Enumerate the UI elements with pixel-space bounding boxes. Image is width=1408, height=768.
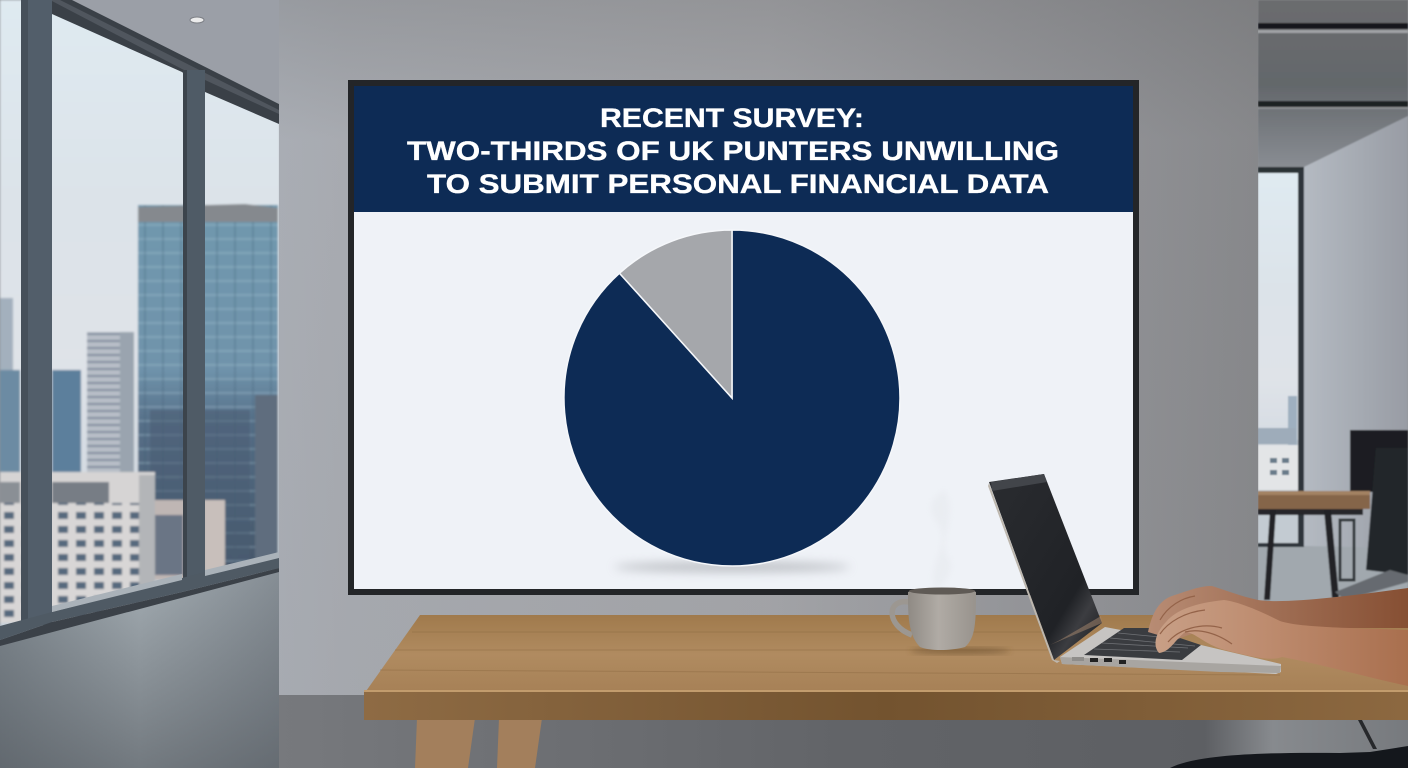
mug handle [892, 602, 912, 635]
table legs [415, 718, 542, 768]
left room floor [0, 570, 279, 768]
laptop lid [989, 474, 1102, 660]
left city view through windows [0, 0, 280, 650]
office chair [1335, 448, 1408, 600]
screen bezel [348, 80, 1139, 595]
table top [364, 615, 1408, 694]
mug body [908, 588, 976, 650]
finger creases [1160, 596, 1232, 644]
title: TWO-THIRDS OF UK PUNTERS UNWILLING [407, 136, 1059, 166]
window frames [0, 0, 279, 646]
pie slice: majority [564, 230, 900, 566]
skyline building striped [87, 332, 134, 472]
screen white panel [354, 86, 1133, 589]
laptop base [1060, 627, 1281, 674]
title [407, 103, 1059, 199]
left room ceiling [64, 0, 279, 104]
skyline building blue [52, 370, 81, 472]
skyline building left [0, 298, 13, 473]
laptop ports [1072, 657, 1126, 664]
table grain [380, 632, 1280, 675]
right room wall [1304, 116, 1408, 560]
low white building [0, 472, 155, 623]
laptop keyboard [1084, 628, 1201, 660]
chair leg under table [1358, 720, 1377, 749]
right room ceiling [1258, 0, 1408, 170]
right room background [1258, 0, 1408, 620]
low pink building [155, 500, 225, 580]
wall-mounted presentation screen [348, 80, 1139, 595]
title: RECENT SURVEY: [600, 103, 864, 133]
foreground wooden table [364, 615, 1408, 768]
near hand and arm [1155, 600, 1408, 686]
laptop [988, 474, 1281, 674]
title: TO SUBMIT PERSONAL FINANCIAL DATA [427, 169, 1049, 199]
right room window [1258, 167, 1304, 567]
back table [1258, 491, 1370, 600]
table front edge [364, 691, 1408, 720]
mug shadow [910, 648, 1010, 654]
glass tower [138, 204, 278, 570]
far hand and arm [1148, 586, 1408, 640]
pie slice: minority [620, 230, 732, 398]
person's lap [1170, 746, 1408, 768]
steam [931, 490, 951, 590]
grey feature wall [279, 0, 1258, 696]
ceiling spot light [190, 17, 204, 23]
monitor [1350, 430, 1408, 492]
typing hands and forearms [1148, 586, 1408, 686]
header banner [354, 86, 1133, 212]
pie chart [564, 230, 900, 566]
coffee mug [892, 490, 1010, 654]
dark foreground floor [279, 695, 1408, 768]
right room floor [1258, 545, 1408, 620]
pie shadow [614, 562, 850, 572]
